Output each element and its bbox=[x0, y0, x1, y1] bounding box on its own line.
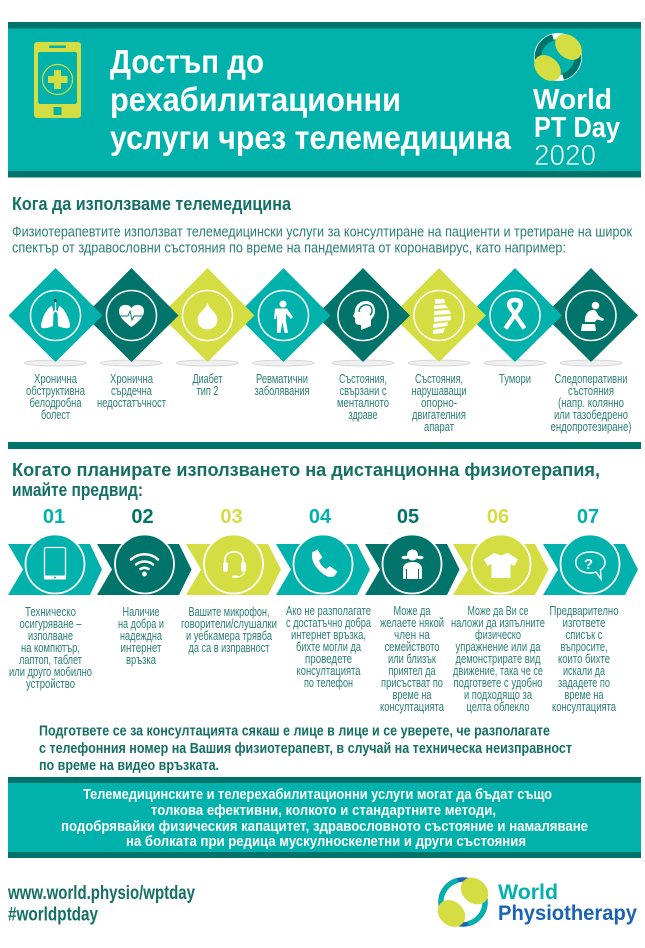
step 01: Техническо bbox=[25, 605, 76, 619]
intro paragraph: спектър от здравословни състояния по време на пандемията от коронавирус, като например: bbox=[12, 240, 566, 256]
step 07: време на bbox=[564, 688, 604, 702]
condition: musculoskeletal bbox=[392, 268, 486, 434]
condition: heart failure: Хронична bbox=[110, 372, 153, 386]
step 03: 03 bbox=[220, 506, 243, 528]
step 07: списък с bbox=[566, 628, 602, 642]
banner text bbox=[61, 786, 588, 850]
step 06: Може да Ви се bbox=[468, 604, 529, 618]
step 07: изгответе bbox=[562, 616, 606, 630]
banner text: подобрявайки физическия капацитет, здравословното състояние и намаляване bbox=[61, 818, 588, 835]
condition: musculoskeletal: двигателния bbox=[412, 408, 466, 422]
condition: COPD: обструктивна bbox=[26, 384, 85, 398]
footer links: www.world.physio/wptday bbox=[7, 883, 195, 904]
preparation note bbox=[39, 722, 572, 774]
icon: spine bbox=[433, 299, 451, 334]
icon: awareness ribbon bbox=[506, 300, 524, 328]
icon: blood drop bbox=[198, 303, 218, 330]
step 01: или друго мобилно bbox=[9, 665, 92, 679]
footer links: #worldptday bbox=[8, 904, 98, 926]
step 05: Може да bbox=[394, 604, 431, 618]
banner text: на болката при редица мускулноскелетни и други състояния bbox=[126, 833, 526, 850]
step 06: физическо bbox=[475, 628, 521, 642]
condition: post-operative bbox=[544, 268, 638, 434]
step 01: устройство bbox=[26, 677, 75, 691]
step 05: или близък bbox=[388, 652, 436, 666]
header banner bbox=[8, 22, 641, 178]
logo: World PT Day 2020: World bbox=[533, 84, 612, 116]
step 05: член на bbox=[394, 628, 430, 642]
icon: head with brain bbox=[353, 301, 375, 330]
condition: heart failure: недостатъчност bbox=[97, 396, 166, 410]
step 04: по телефон bbox=[304, 676, 353, 690]
step 03: и уебкамера трявба bbox=[186, 629, 272, 643]
step 02: интернет bbox=[120, 641, 162, 655]
condition: diabetes bbox=[160, 268, 254, 398]
icon: speech bubble with question mark bbox=[576, 552, 605, 579]
step 06: 06 bbox=[487, 506, 509, 528]
step 03: говорители/слушалки bbox=[181, 617, 277, 631]
banner text: толкова ефективни, колкото и стандартните методи, bbox=[151, 802, 496, 819]
step 06: подгответе с удобно bbox=[454, 676, 543, 690]
logo: World PT Day 2020: 2020 bbox=[534, 140, 596, 172]
step 05: семейството bbox=[384, 640, 440, 654]
title: услуги чрез телемедицина bbox=[110, 119, 512, 156]
condition: tumours: Тумори bbox=[499, 372, 531, 386]
heading: remote physiotherapy planning: Когато планирате използването на дистанционна физиотерапия, bbox=[12, 459, 600, 480]
icon: person walking bbox=[274, 300, 293, 333]
logo: World Physiotherapy: Physiotherapy bbox=[498, 901, 637, 925]
step 07: зададете по bbox=[558, 676, 610, 690]
step 02: на добра и bbox=[118, 617, 164, 631]
step 04 bbox=[276, 506, 371, 690]
condition: post-operative: (напр. колянно bbox=[558, 396, 624, 410]
effectiveness banner bbox=[8, 777, 641, 858]
step 01: изполване bbox=[28, 629, 73, 643]
step 04: бихте могли да bbox=[296, 640, 361, 654]
condition: musculoskeletal: нарушаващи bbox=[412, 384, 467, 398]
icon: heart with pulse bbox=[119, 305, 144, 327]
step 07 bbox=[543, 506, 638, 714]
step 03: Вашите микрофон, bbox=[188, 605, 270, 619]
heading: remote physiotherapy planning: имайте предвид: bbox=[12, 479, 143, 500]
step 04: интернет връзка, bbox=[291, 628, 366, 642]
title: рехабилитационни bbox=[110, 81, 401, 118]
step 07: които бихте bbox=[558, 652, 610, 666]
icon: lungs bbox=[41, 299, 70, 328]
step 02 bbox=[97, 506, 192, 667]
condition: tumours bbox=[468, 268, 562, 386]
condition: diabetes: тип 2 bbox=[196, 384, 219, 398]
step 06: упражнение или да bbox=[456, 640, 541, 654]
icon: telephone handset bbox=[312, 550, 338, 577]
step 02: 02 bbox=[131, 506, 154, 528]
step 05: консултацията bbox=[380, 700, 444, 714]
condition: musculoskeletal: Състояния, bbox=[415, 372, 463, 386]
step 04: консултацията bbox=[296, 664, 361, 678]
step 06: целта облекло bbox=[466, 700, 530, 714]
step 02: надеждна bbox=[120, 629, 162, 643]
icon: smartphone with medical cross bbox=[34, 42, 81, 118]
step 04: с достатъчно добра bbox=[286, 616, 371, 630]
footer links bbox=[7, 883, 195, 926]
condition: rheumatic diseases: заболявания bbox=[254, 384, 310, 398]
step 02: връзка bbox=[126, 653, 156, 667]
step 01 bbox=[8, 506, 102, 691]
step 06: и подходящо за bbox=[464, 688, 532, 702]
step 06: наложи да изпълните bbox=[451, 616, 545, 630]
step 01: осигуряване – bbox=[20, 617, 82, 631]
condition: rheumatic diseases: Ревматични bbox=[256, 372, 308, 386]
step 07: Предварително bbox=[550, 604, 619, 618]
step 07: консултацията bbox=[552, 700, 616, 714]
condition: mental health bbox=[316, 268, 410, 422]
step 03 bbox=[181, 506, 281, 655]
step 04: Ако не разполагате bbox=[286, 604, 371, 618]
condition: mental health: здраве bbox=[348, 408, 378, 422]
intro paragraph bbox=[12, 224, 633, 256]
banner text: Телемедицинските и телерехабилитационни услуги могат да бъдат също bbox=[83, 786, 552, 803]
condition: musculoskeletal: опорно- bbox=[421, 396, 457, 410]
step 02: Наличие bbox=[122, 605, 160, 619]
icon: tablet bbox=[44, 548, 66, 580]
step 04: проведете bbox=[305, 652, 352, 666]
icon: speech bubble with question mark: ? bbox=[584, 556, 593, 573]
condition: COPD bbox=[8, 268, 102, 422]
condition: mental health: менталното bbox=[337, 396, 389, 410]
step 06 bbox=[451, 506, 548, 714]
step 05 bbox=[365, 506, 460, 714]
condition: COPD: белодробна bbox=[30, 396, 82, 410]
heading: when to use telemedicine: Кога да използваме телемедицина bbox=[12, 193, 292, 214]
step 03: да са в изправност bbox=[188, 641, 270, 655]
condition: rheumatic diseases bbox=[236, 268, 330, 398]
logo: World Physiotherapy bbox=[432, 872, 637, 932]
condition: COPD: Хронична bbox=[34, 372, 77, 386]
condition: COPD: болест bbox=[41, 408, 70, 422]
step 07: въпросите, bbox=[560, 640, 608, 654]
condition: heart failure: сърдечна bbox=[111, 384, 152, 398]
step 07: искали да bbox=[563, 664, 605, 678]
step 04: 04 bbox=[309, 506, 332, 528]
condition: mental health: Състояния, bbox=[339, 372, 387, 386]
condition: heart failure bbox=[84, 268, 178, 410]
step 05: приятел да bbox=[388, 664, 436, 678]
step 05: време на bbox=[392, 688, 432, 702]
logo: World Physiotherapy: World bbox=[498, 880, 558, 904]
step 01: 01 bbox=[43, 506, 65, 528]
icon: wifi bbox=[131, 554, 158, 575]
step 05: присъстват по bbox=[381, 676, 443, 690]
step 01: на компютър, bbox=[21, 641, 80, 655]
icon: seated person bbox=[581, 302, 604, 331]
condition: post-operative: състояния bbox=[568, 384, 614, 398]
condition: musculoskeletal: апарат bbox=[424, 420, 454, 434]
icon: family member bbox=[402, 550, 424, 579]
heading: remote physiotherapy planning bbox=[12, 459, 600, 500]
step 07: 07 bbox=[577, 506, 599, 528]
logo: World PT Day 2020 bbox=[529, 29, 620, 172]
icon: t-shirt bbox=[484, 553, 518, 578]
title: Достъп до bbox=[110, 43, 264, 80]
preparation note: Подгответе се за консултацията сякаш е лице в лице и се уверете, че разполагате bbox=[39, 722, 550, 740]
step 05: 05 bbox=[397, 506, 419, 528]
step 01: лаптоп, таблет bbox=[19, 653, 82, 667]
title bbox=[110, 43, 512, 156]
icon: headset bbox=[223, 552, 246, 578]
step 05: желаете някой bbox=[380, 616, 444, 630]
step 06: демонстрирате вид bbox=[456, 652, 541, 666]
preparation note: по време на видео връзката. bbox=[39, 757, 219, 774]
logo: World PT Day 2020: PT Day bbox=[534, 112, 620, 144]
condition: diabetes: Диабет bbox=[192, 372, 223, 386]
condition: mental health: свързани с bbox=[340, 384, 386, 398]
step 06: движение, така че се bbox=[453, 664, 543, 678]
